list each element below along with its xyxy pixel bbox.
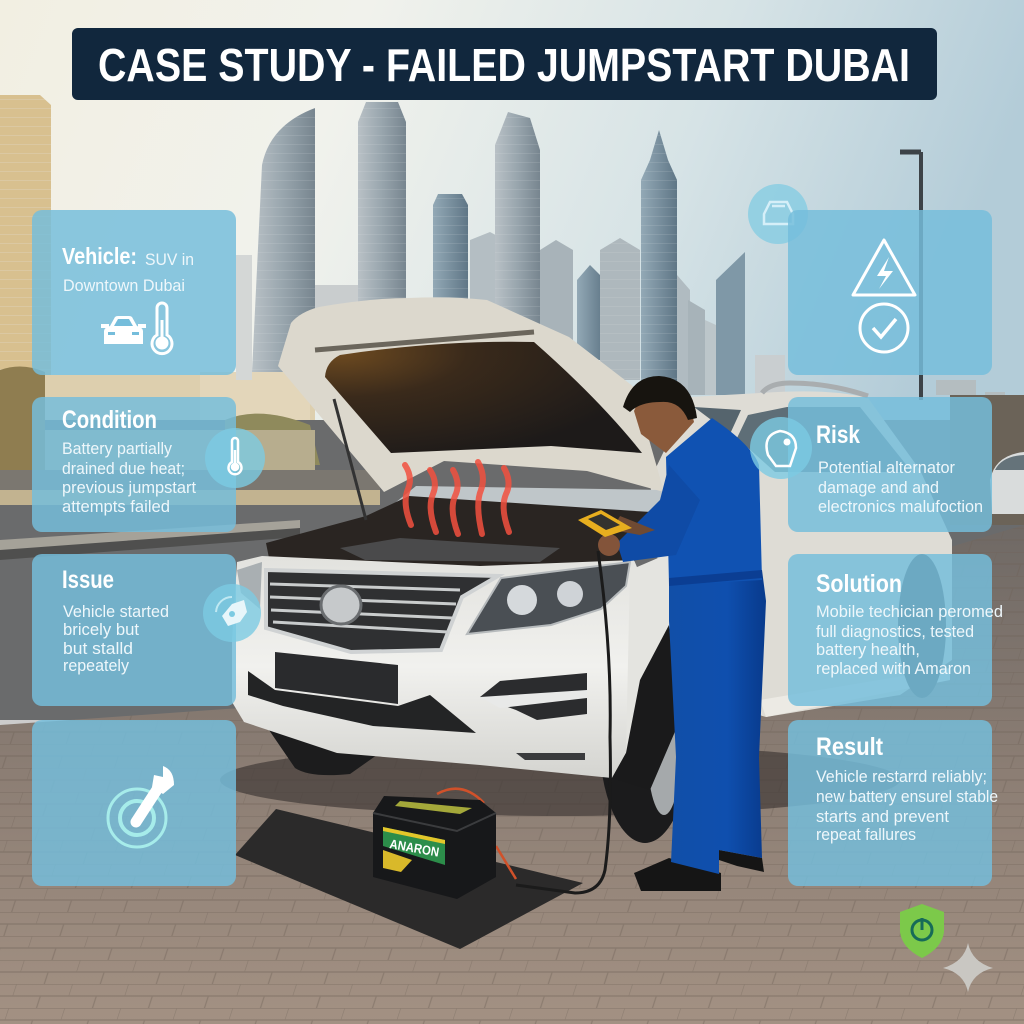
car [220,297,952,843]
icon: engine badge [203,584,261,642]
panel: result: Vehicle restarrd reliably; [816,767,987,786]
panel: risk: Risk [816,421,860,449]
panel: solution: battery health, [816,640,920,659]
icon: risk badge [750,417,812,479]
icon: car [101,316,146,344]
headlight [467,562,630,634]
panel: result: repeat fallures [816,825,916,844]
panel: risk: electronics malufoction [818,497,983,516]
open hood [278,297,664,492]
brick pavement [0,525,1024,1024]
front left wheel [269,730,384,775]
number plate [275,652,398,704]
panel: risk: Potential alternator [818,458,955,477]
panel: solution: Mobile techician peromed [816,602,1003,621]
icon: wrench and target [108,766,174,847]
panel: vehicle: Downtown Dubai [63,276,185,295]
shoes [634,858,721,891]
cable from multimeter [516,551,610,893]
panel: issue: but stalld [63,639,133,658]
road and ground [0,366,1024,720]
torso [666,418,762,585]
panel: result [788,720,998,886]
panel: result: new battery ensurel stable [816,787,998,806]
arm [617,465,700,562]
icon: car top badge [748,184,808,244]
panel: vehicle: Vehicle: [62,243,137,269]
icon: thermometer [152,303,172,354]
icon: warning triangle [853,240,915,295]
panel: warning [788,210,992,375]
panel: wrench [32,720,236,886]
panel: condition [32,397,236,532]
rear wheel [898,554,946,698]
wheel arch [612,625,680,790]
panel: condition: Battery partially [62,439,172,458]
car rear body [650,391,952,717]
battery [373,789,516,899]
panel: vehicle: SUV in [145,250,194,269]
car badge [321,586,361,624]
front body [232,556,659,778]
front right wheel [599,627,691,843]
panel: issue: repeately [63,656,129,675]
skyline towers [236,102,1005,420]
head [634,398,694,453]
mechanic [578,376,766,891]
panel: issue: bricely but [63,620,139,639]
engine bay [266,496,659,568]
icon: sparkle [943,943,993,992]
legs [669,570,766,874]
lower grille [248,671,476,733]
panel: issue [32,554,236,706]
left beige building [0,95,315,430]
panel: condition: Condition [62,406,157,434]
icon: green power shield [900,904,944,958]
panel: condition: drained due heat; [62,459,185,478]
battery: ANARON [388,836,440,860]
icon: thermometer badge [205,428,265,488]
background white car [990,452,1024,514]
panel: solution: full diagnostics, tested [816,622,974,641]
panel: risk [788,397,992,532]
background sky [0,0,1024,520]
panel: solution: replaced with Amaron [816,659,971,678]
panel: result: starts and prevent [816,807,949,826]
title banner [72,28,937,100]
panel: solution: Solution [816,570,902,598]
panel: result: Result [816,733,884,761]
belt [669,570,762,586]
icon: check circle [860,304,908,352]
hand [598,534,620,556]
panel: vehicle [32,210,236,375]
title banner: CASE STUDY - FAILED JUMPSTART DUBAI [98,39,910,91]
second hand [612,516,655,535]
black floor mat [235,809,583,949]
hair [623,376,697,420]
panel: risk: damage and and [818,478,939,497]
car shadow [220,744,900,816]
windscreen glimpse under hood [380,486,665,530]
panel: issue: Vehicle started [63,602,169,621]
street lamp [900,152,921,400]
panel: condition: previous jumpstart [62,478,196,497]
multimeter [578,510,632,537]
grille [266,570,498,652]
panel: solution [788,554,1003,706]
panel: condition: attempts failed [62,497,170,516]
heat waves [405,462,509,534]
hood prop rod [334,399,366,520]
panel: issue: Issue [62,566,114,594]
